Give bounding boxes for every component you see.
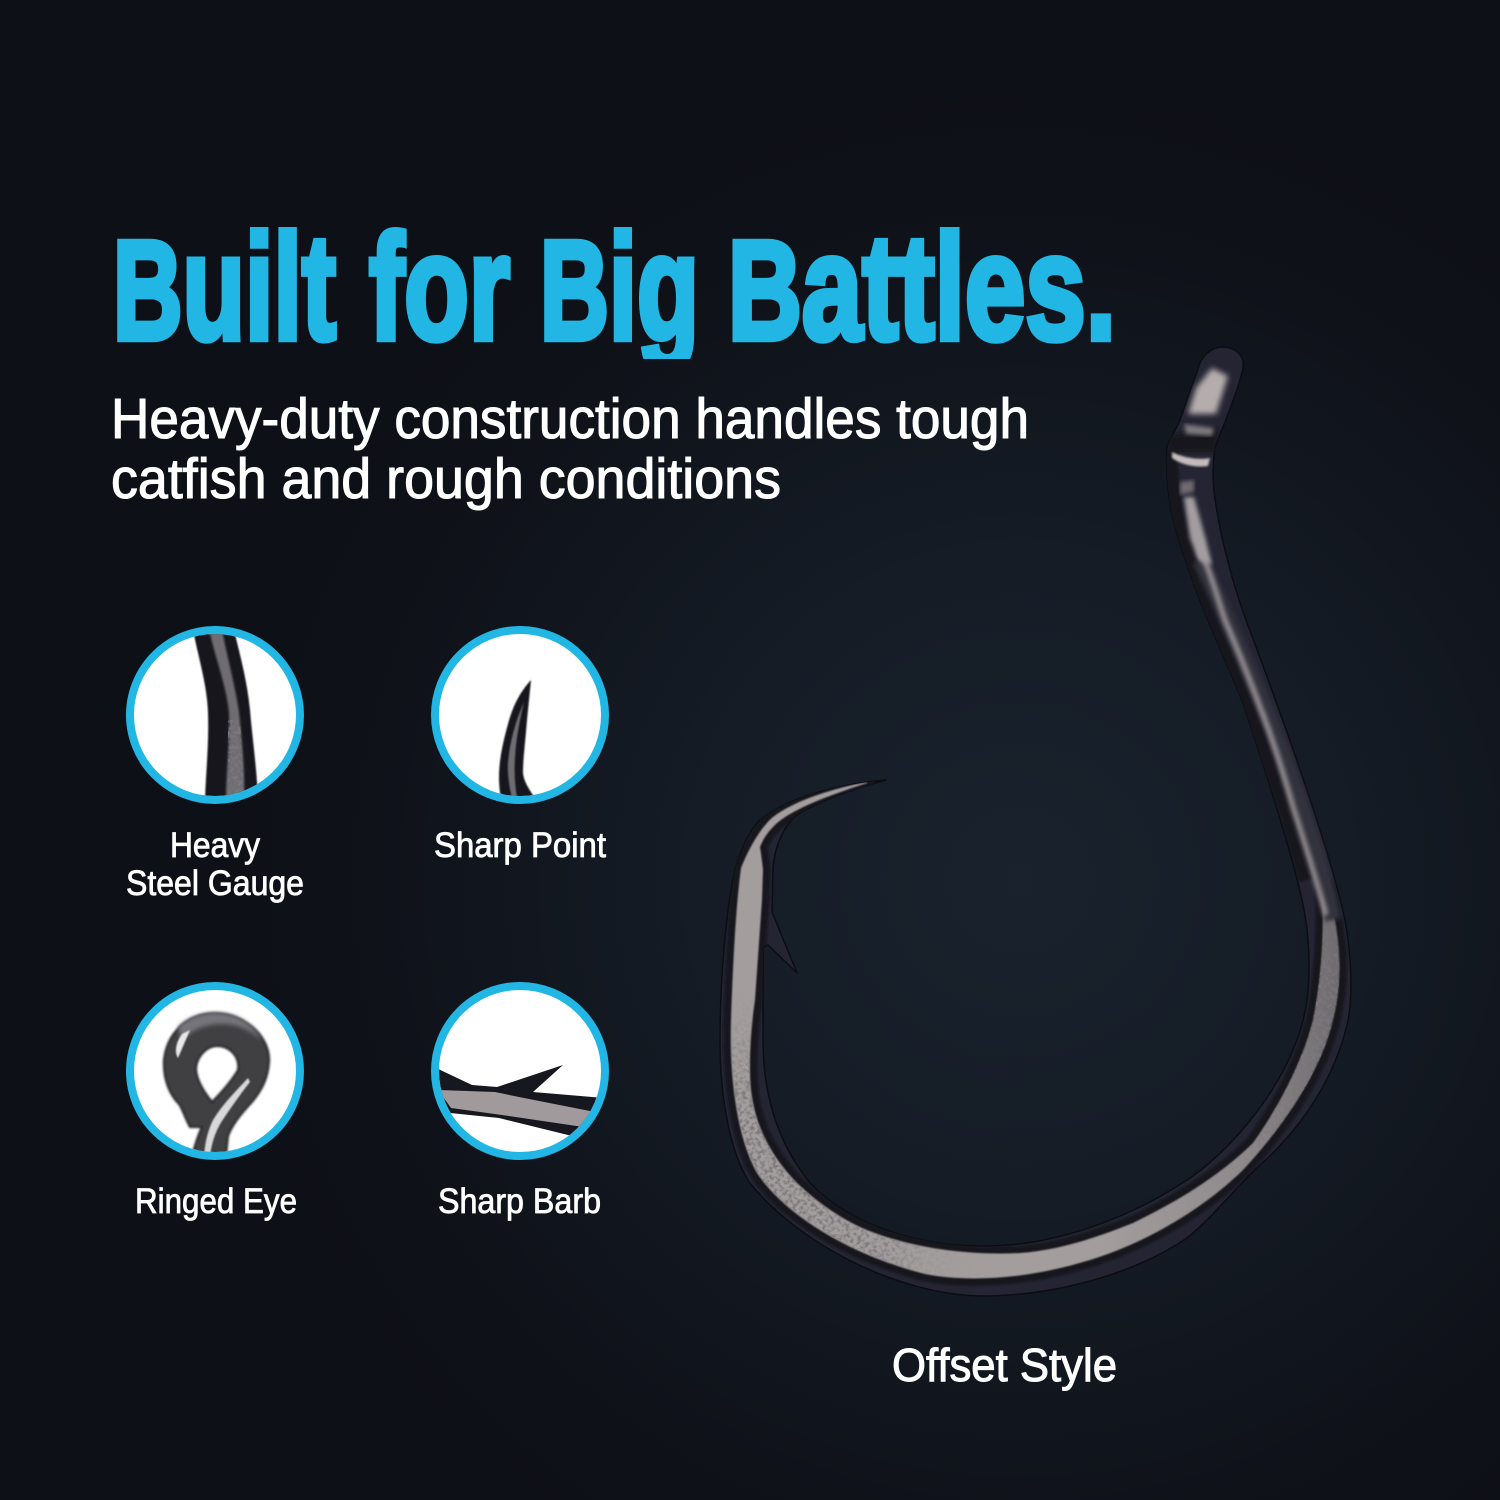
title xyxy=(117,227,1111,359)
subtitle: Heavy-duty construction handles tough xyxy=(111,387,1029,451)
subtitle: catfish and rough conditions xyxy=(111,447,781,511)
title: Big xyxy=(540,203,699,371)
hook silhouette xyxy=(720,347,1351,1296)
eye highlight xyxy=(1188,368,1228,414)
feature: sharp barb xyxy=(435,986,605,1221)
label: Sharp Barb xyxy=(438,1182,601,1221)
title: Battles. xyxy=(728,203,1116,371)
icon: ringed eye close-up xyxy=(130,986,300,1156)
feature: sharp point xyxy=(434,630,606,865)
label: Ringed Eye xyxy=(135,1182,297,1221)
offset style caption: Offset Style xyxy=(892,1339,1117,1391)
hook illustration xyxy=(720,347,1351,1296)
icon: sharp barb close-up xyxy=(435,986,605,1156)
shank highlight line xyxy=(1200,550,1326,915)
icon: sharp point close-up xyxy=(435,630,605,800)
dark band around main highlight xyxy=(731,782,1340,1278)
icon: heavy steel gauge close-up xyxy=(130,630,300,800)
label: Sharp Point xyxy=(434,826,606,865)
label: Heavy xyxy=(170,826,260,865)
main highlight band xyxy=(731,782,1340,1278)
subtitle xyxy=(111,387,1029,511)
feature: heavy steel gauge xyxy=(126,630,304,903)
eye dark band xyxy=(1166,428,1218,452)
highlight texture xyxy=(732,938,1340,1270)
label xyxy=(126,826,304,903)
title: Built xyxy=(113,203,336,371)
shank soft band xyxy=(1200,560,1333,920)
upper shank highlight xyxy=(1184,497,1212,565)
label: Steel Gauge xyxy=(126,864,304,903)
feature: ringed eye xyxy=(130,986,300,1221)
hook shading and highlights xyxy=(731,368,1340,1278)
shank dark inner side xyxy=(1170,450,1306,880)
title: for xyxy=(369,203,510,371)
